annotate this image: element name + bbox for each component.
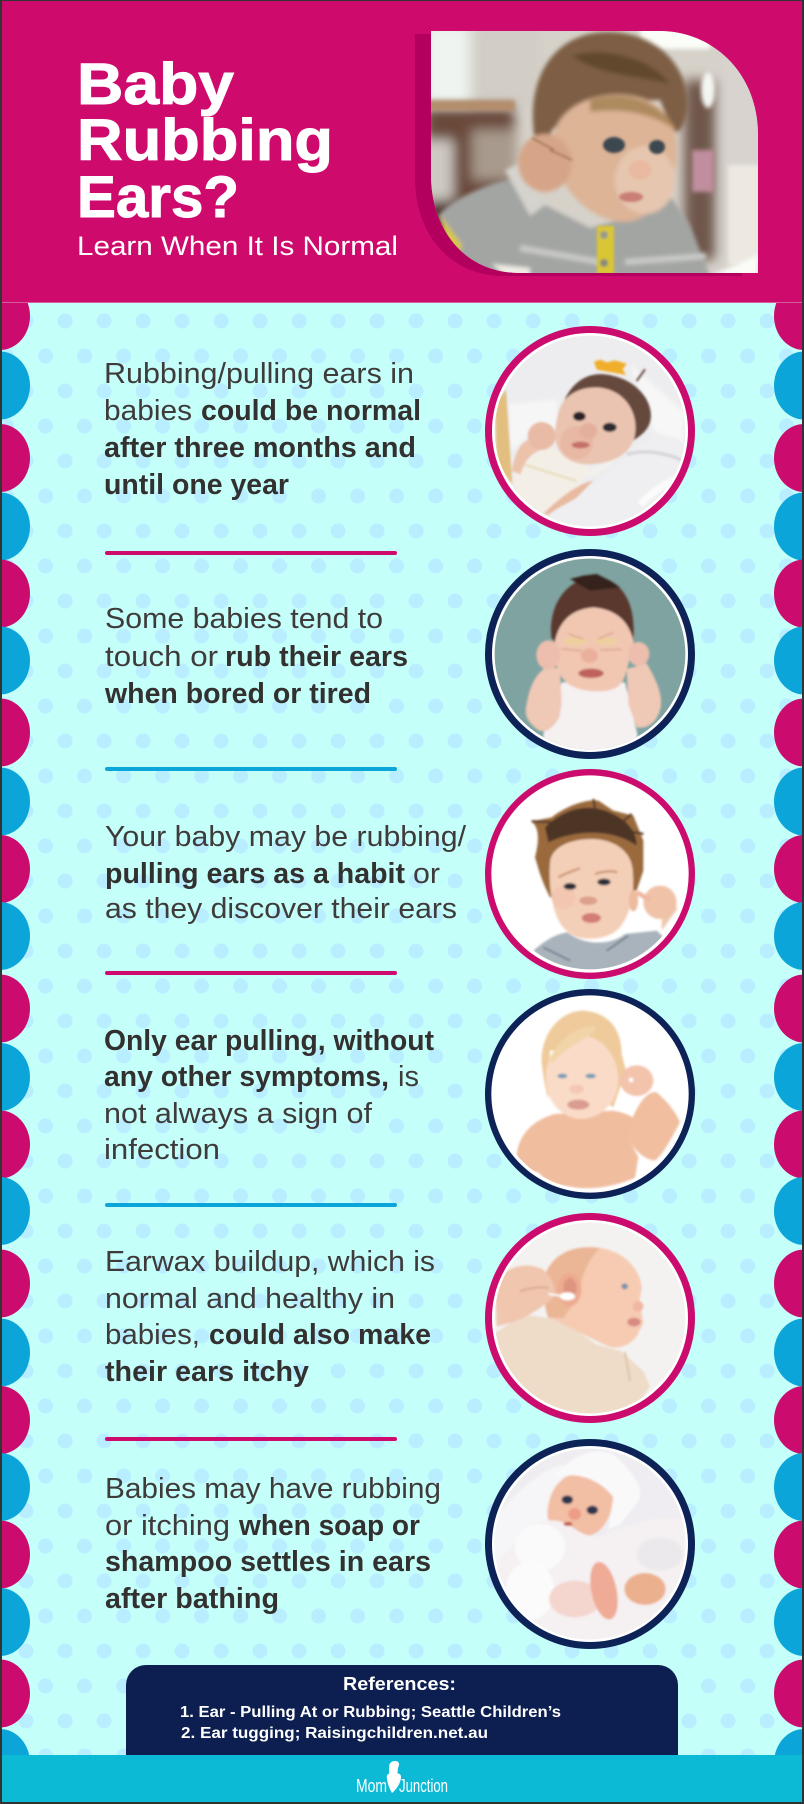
- references list: [180, 1704, 561, 1742]
- text block 6: or itching: [105, 1510, 230, 1542]
- references list: 2. Ear tugging; Raisingchildren.net.au: [181, 1725, 488, 1742]
- text block 5: their ears itchy: [105, 1356, 309, 1388]
- title: Ears?: [77, 165, 239, 230]
- text block 1: could be normal: [201, 395, 421, 427]
- text block 3: as they discover their ears: [105, 893, 457, 925]
- text block 2: when bored or tired: [104, 678, 371, 710]
- text block 3: or: [413, 858, 441, 890]
- text block 1: Rubbing/pulling ears in: [104, 358, 414, 390]
- photo circle 3: toddler with spiky hair: [485, 769, 695, 979]
- text block 3: pulling ears as a habit: [105, 858, 406, 890]
- text block 3: Your baby may be rubbing/: [105, 821, 466, 853]
- text block 4: [104, 1025, 435, 1166]
- text block 4: Only ear pulling, without: [104, 1025, 435, 1057]
- logo: MomJunction: Junction: [399, 1776, 448, 1796]
- photo circle 4: blond toddler: [485, 989, 695, 1199]
- text block 6: when soap or: [238, 1510, 420, 1542]
- divider blue: [105, 767, 397, 771]
- text block 1: babies: [104, 395, 192, 427]
- header photo shadow: [415, 34, 742, 276]
- text block 2: rub their ears: [225, 641, 408, 673]
- references list: 1. Ear - Pulling At or Rubbing; Seattle Children’s: [180, 1704, 561, 1721]
- text block 4: any other symptoms,: [104, 1061, 389, 1093]
- photo circle 6: baby in bath foam: [480, 1434, 700, 1654]
- scalloped left edge: [2, 303, 30, 1755]
- text block 1: until one year: [104, 469, 289, 501]
- scalloped right edge: [774, 303, 802, 1755]
- photo circle 5: cleaning baby ear with swab: [480, 1208, 700, 1428]
- text block 5: could also make: [209, 1319, 431, 1351]
- title: Rubbing: [77, 108, 333, 173]
- panel: references: [126, 1665, 678, 1755]
- references heading: References:: [343, 1674, 456, 1694]
- text block 5: normal and healthy in: [105, 1283, 395, 1315]
- text block 6: [105, 1473, 441, 1615]
- text block 6: shampoo settles in ears: [105, 1546, 431, 1578]
- panel: footer: [2, 1755, 802, 1802]
- text block 1: [104, 358, 421, 501]
- text block 5: babies,: [105, 1319, 200, 1351]
- text block 4: infection: [104, 1134, 220, 1166]
- text block 3: [105, 821, 466, 925]
- text block 2: touch or: [105, 641, 219, 673]
- photo circle 1: baby with flower: [480, 321, 700, 541]
- photo circle 2: crying newborn: [480, 544, 700, 764]
- logo: MomJunction: Mom: [356, 1776, 387, 1796]
- divider pink: [105, 1437, 397, 1441]
- subtitle: Learn When It Is Normal: [77, 231, 398, 261]
- text block 6: after bathing: [105, 1583, 279, 1615]
- text block 2: Some babies tend to: [105, 603, 383, 635]
- text block 2: [104, 603, 408, 710]
- divider pink: [105, 551, 397, 555]
- text block 5: [105, 1246, 435, 1388]
- header photo: baby rubbing ear: [425, 25, 762, 276]
- text block 5: Earwax buildup, which is: [105, 1246, 435, 1278]
- text block 4: not always a sign of: [104, 1098, 372, 1130]
- panel: header: [2, 1, 802, 302]
- text block 4: is: [398, 1061, 419, 1093]
- divider blue: [105, 1203, 397, 1207]
- title: Baby: [77, 52, 234, 117]
- text block 1: after three months and: [104, 432, 416, 464]
- title: [77, 52, 333, 230]
- divider pink: [105, 971, 397, 975]
- text block 6: Babies may have rubbing: [105, 1473, 441, 1505]
- logo: MomJunction: [356, 1761, 448, 1796]
